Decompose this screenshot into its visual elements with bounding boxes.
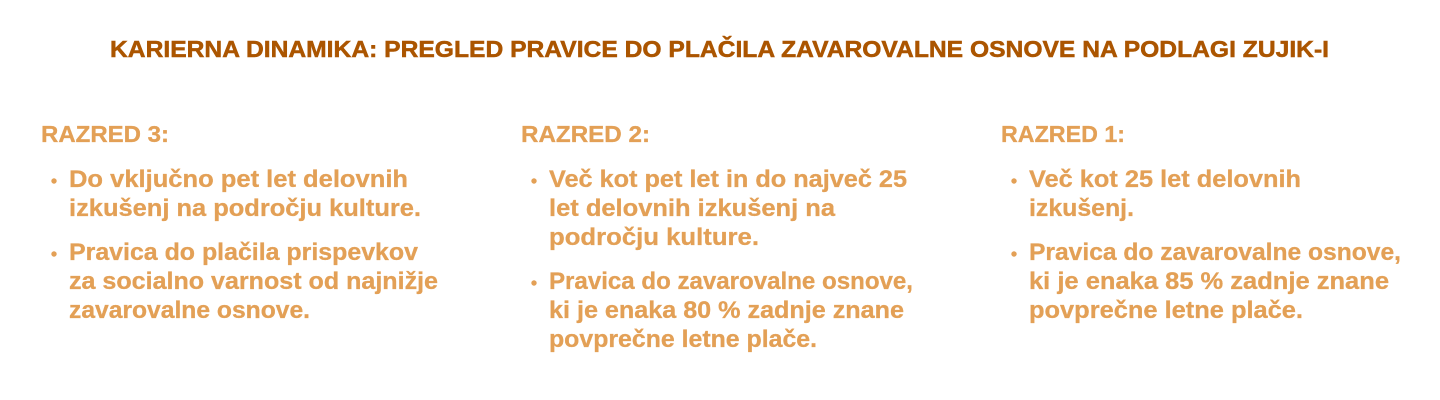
heading: razred 1: RAZRED 1: bbox=[1001, 121, 1125, 147]
bullet item: entitlement: Pravica do plačila prispevkov bbox=[69, 239, 419, 266]
bullet item: experience: let delovnih izkušenj na bbox=[549, 195, 836, 222]
bullet item: experience: področju kulture. bbox=[549, 224, 759, 251]
bullet item: entitlement bbox=[51, 239, 438, 324]
bullet item: entitlement: Pravica do zavarovalne osnove, bbox=[549, 268, 913, 295]
bullet item: entitlement: Pravica do zavarovalne osnove, bbox=[1029, 239, 1401, 266]
heading: razred 2: RAZRED 2: bbox=[521, 121, 650, 147]
heading: razred 3: RAZRED 3: bbox=[41, 121, 169, 147]
bullet item: entitlement: povprečne letne plače. bbox=[1029, 297, 1303, 324]
bullet item: experience: Več kot pet let in do največ 25 bbox=[549, 166, 907, 193]
panel: razred 2 bbox=[521, 121, 913, 353]
bullet item: entitlement bbox=[1011, 239, 1401, 324]
bullet item: experience bbox=[1011, 166, 1301, 222]
bullet item: entitlement: povprečne letne plače. bbox=[549, 326, 817, 353]
bullet item: entitlement: zavarovalne osnove. bbox=[69, 297, 310, 324]
bullet item: experience: Do vključno pet let delovnih bbox=[69, 166, 408, 193]
bullet item: experience: izkušenj. bbox=[1029, 195, 1134, 222]
bullet item: experience bbox=[51, 166, 421, 222]
bullet item: entitlement: za socialno varnost od najnižje bbox=[69, 268, 438, 295]
panel: razred 3 bbox=[41, 121, 438, 324]
panel: razred 1 bbox=[1001, 121, 1401, 324]
bullet item: experience: Več kot 25 let delovnih bbox=[1029, 166, 1301, 193]
bullet item: entitlement: ki je enaka 80 % zadnje znane bbox=[549, 297, 904, 324]
bullet item: experience bbox=[531, 166, 907, 251]
bullet item: entitlement bbox=[531, 268, 913, 353]
title: KARIERNA DINAMIKA: PREGLED PRAVICE DO PLAČILA ZAVAROVALNE OSNOVE NA PODLAGI ZUJIK-I bbox=[110, 35, 1329, 62]
bullet item: experience: izkušenj na področju kulture. bbox=[69, 195, 421, 222]
bullet item: entitlement: ki je enaka 85 % zadnje znane bbox=[1029, 268, 1389, 295]
